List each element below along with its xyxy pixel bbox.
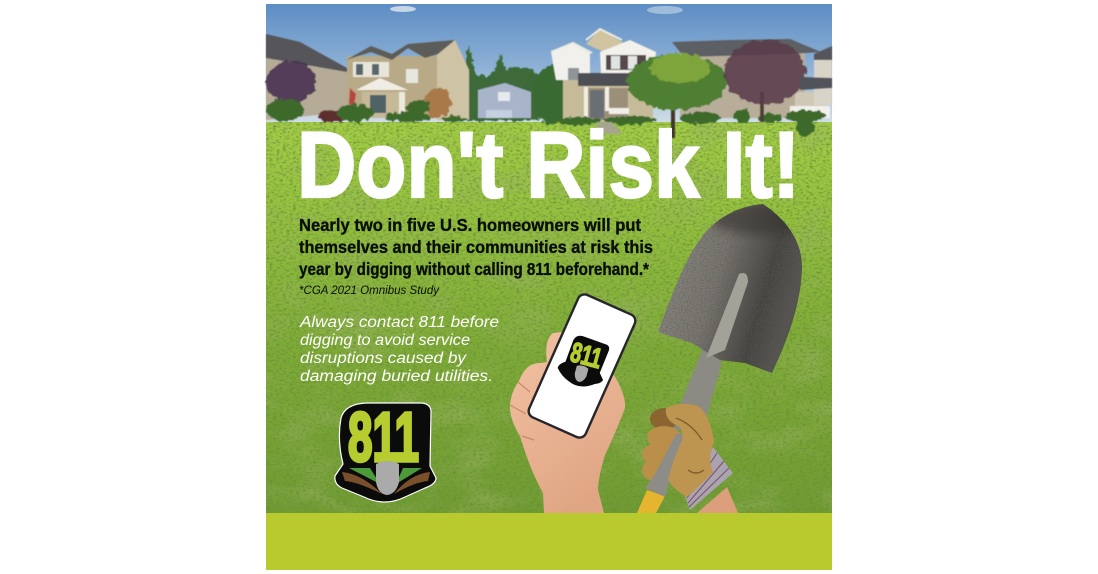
lower porch roof right	[800, 77, 832, 90]
text block: call to action: Always contact 811 before	[299, 314, 499, 331]
green tree	[627, 53, 727, 138]
text block: main statistic	[299, 215, 653, 279]
tall bush	[533, 66, 569, 124]
finger creases	[510, 382, 534, 440]
blade grain	[658, 204, 802, 373]
purple tree right	[724, 40, 806, 122]
glove cuff	[684, 447, 733, 510]
house 1	[266, 34, 348, 120]
phone logo number: 811	[567, 336, 605, 374]
logo shovel	[376, 461, 399, 495]
house 3	[551, 29, 656, 122]
text block: main statistic: Nearly two in five U.S. homeowners will put	[299, 215, 641, 235]
autumn shrub	[425, 88, 451, 118]
background trees	[461, 46, 540, 121]
front walkway steps	[596, 122, 622, 134]
text block: call to action: disruptions caused by	[300, 350, 467, 367]
american flag	[349, 88, 356, 105]
forearm	[697, 487, 738, 513]
phone logo shovel	[573, 364, 589, 383]
illustration: gloved hand holding shovel	[637, 202, 810, 513]
house at right edge	[814, 46, 832, 105]
text block: call to action	[299, 314, 499, 385]
hand	[510, 332, 625, 513]
text block: call to action: digging to avoid service	[300, 332, 470, 349]
logo soil	[342, 472, 382, 494]
sky	[266, 4, 832, 122]
blade highlight groove	[706, 273, 748, 358]
blade top shading	[711, 204, 792, 237]
phone body	[526, 292, 638, 440]
phone	[526, 292, 638, 440]
illustration: hand holding phone	[510, 292, 638, 513]
phone logo	[554, 332, 613, 392]
text block: main statistic: year by digging without calling 811 beforehand.*	[299, 259, 649, 279]
glove creases	[676, 418, 704, 473]
grass blotches	[266, 122, 832, 513]
text block: call to action: damaging buried utilities.	[300, 368, 493, 385]
title: Don't Risk It!	[297, 112, 800, 217]
photo: row of suburban houses	[266, 29, 832, 138]
yellow handle	[637, 490, 665, 513]
footer band	[266, 513, 832, 570]
shovel blade	[658, 204, 802, 373]
house 2	[346, 40, 469, 120]
glove fingers	[642, 408, 681, 481]
foundation shrubs	[266, 99, 825, 136]
infographic poster	[264, 4, 833, 570]
cuff stripes	[687, 453, 729, 507]
logo: 811 shovel	[335, 398, 436, 502]
logo backing	[335, 403, 436, 502]
cloud streak	[647, 6, 683, 14]
grass lawn	[266, 122, 832, 513]
panel: poster background	[266, 4, 832, 513]
phone logo backing	[554, 332, 613, 392]
logo number: 811	[348, 398, 419, 476]
purple tree left	[266, 61, 316, 120]
text block: main statistic: themselves and their communities at risk this	[299, 237, 653, 257]
source note: *CGA 2021 Omnibus Study	[299, 285, 440, 297]
shovel shaft	[672, 348, 722, 430]
metal ferrule	[645, 433, 684, 497]
grass texture	[266, 122, 832, 513]
cloud	[390, 6, 416, 12]
small blue house	[478, 83, 531, 118]
house 4	[672, 39, 830, 118]
logo green leaves	[349, 468, 380, 484]
glove palm	[666, 404, 714, 497]
